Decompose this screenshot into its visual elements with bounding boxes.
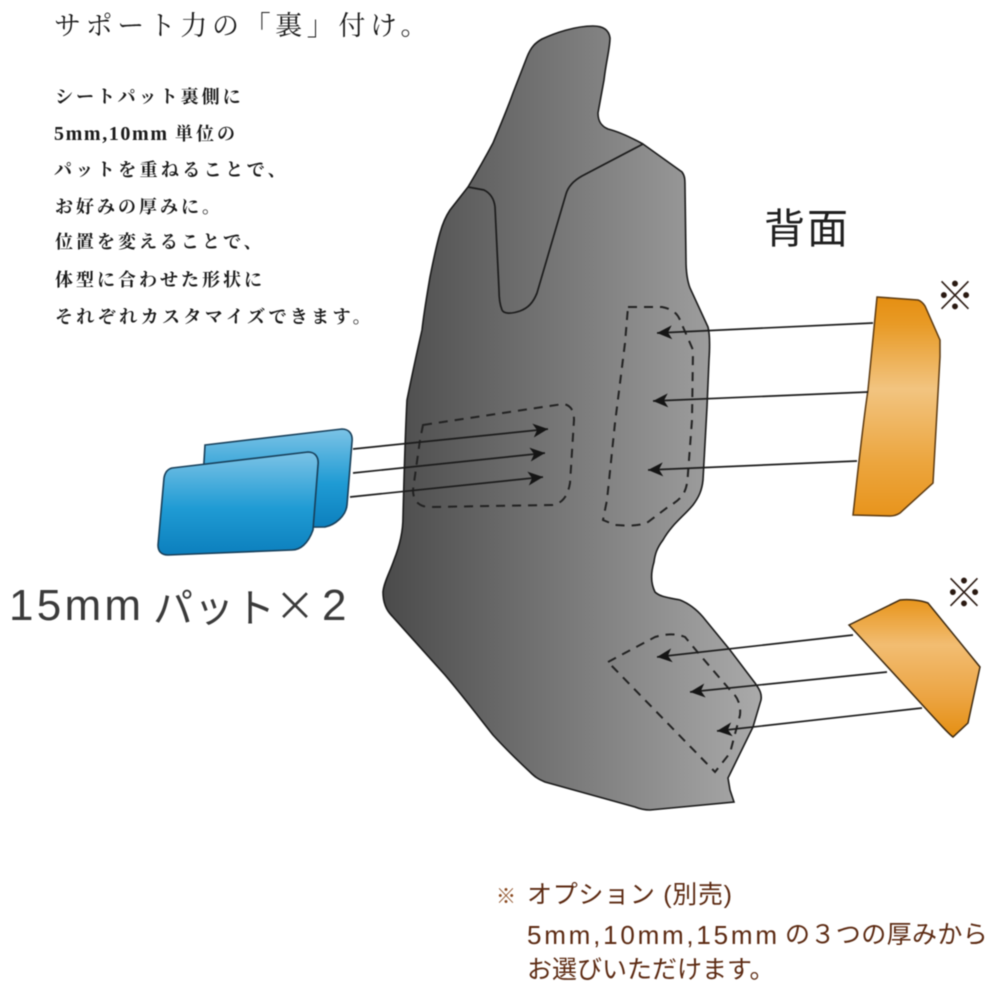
label: 15mm pad x2: ×	[275, 574, 315, 632]
rear blue pad	[200, 429, 352, 528]
text block: description: 単位の	[175, 124, 238, 144]
lower orange pad	[849, 600, 980, 737]
headrest seam line	[468, 144, 643, 313]
seat pad back view	[383, 26, 761, 810]
option note	[496, 881, 988, 984]
label: 15mm pad x2	[9, 574, 346, 632]
label: back side: 背面	[764, 206, 850, 252]
text block: description: 位置を変えることで、	[55, 232, 265, 252]
text block: description: お好みの厚みに。	[55, 197, 223, 217]
label: 15mm pad x2: 15mm	[9, 581, 141, 630]
upper orange pad	[853, 297, 940, 516]
arrows: lower orange pad to seat	[657, 635, 922, 731]
option note: 5mm,10mm,15mm	[527, 920, 777, 950]
label: 15mm pad x2: 2	[322, 581, 346, 630]
text block: description: 体型に合わせた形状に	[55, 269, 265, 290]
arrows: blue pads to seat	[350, 429, 548, 497]
marker: upper option: ※	[935, 276, 975, 319]
dashed area: left pad position	[413, 404, 574, 507]
marker: lower option: ※	[944, 573, 984, 616]
text block: description: パットを重ねることで、	[54, 160, 289, 180]
blue pads	[158, 429, 352, 555]
text block: description: シートパット裏側に	[55, 86, 244, 107]
option note: の３つの厚みから	[785, 921, 988, 949]
title: サポート力の「裏」付け。	[54, 11, 432, 41]
text block: description: 5mm,10mm	[54, 123, 167, 145]
text block: description	[54, 86, 374, 327]
option note: ※	[496, 886, 516, 908]
option note: お選びいただけます。	[527, 956, 775, 984]
label: 15mm pad x2: パット	[153, 587, 276, 631]
text block: description: それぞれカスタマイズできます。	[55, 307, 374, 327]
dashed area: upper right pad position	[603, 307, 693, 526]
front blue pad	[158, 452, 318, 555]
option note: オプション (別売)	[527, 881, 732, 909]
arrows: upper orange pad to seat	[648, 323, 873, 470]
dashed area: lower right pad position	[608, 634, 740, 772]
